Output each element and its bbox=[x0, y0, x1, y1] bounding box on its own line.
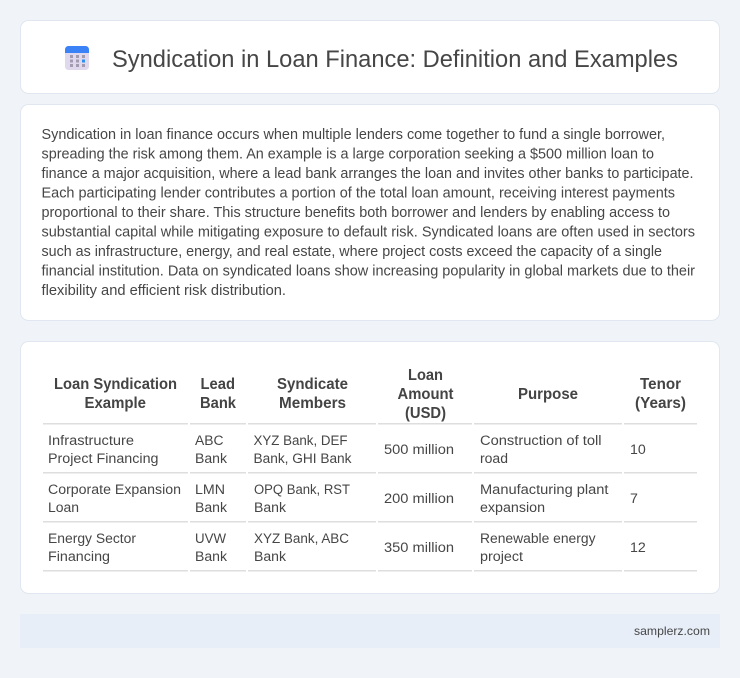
panel: header bbox=[20, 20, 720, 94]
text block: description paragraph: flexibility and efficient risk distribution. bbox=[42, 283, 286, 299]
text block: description paragraph bbox=[42, 127, 695, 299]
table row: energy sector financing: Bank bbox=[195, 549, 228, 565]
table row: energy sector financing: Financing bbox=[48, 549, 110, 565]
table header row: Bank bbox=[200, 395, 236, 412]
table row: infrastructure project financing: 10 bbox=[630, 442, 646, 458]
text block: description paragraph: substantial capital while mitigating exposure to default risk. Syndicated loans are often used in sectors bbox=[42, 224, 695, 240]
table row: infrastructure project financing bbox=[48, 433, 646, 467]
icon: calendar bbox=[65, 46, 89, 70]
table header row: Amount bbox=[398, 386, 454, 403]
table row: energy sector financing: 12 bbox=[630, 540, 646, 556]
table header row: (USD) bbox=[405, 405, 446, 422]
table row: corporate expansion loan: Bank bbox=[254, 500, 287, 516]
table row: corporate expansion loan: expansion bbox=[480, 500, 545, 516]
table row: infrastructure project financing: Infrastructure bbox=[48, 433, 134, 449]
panel: loan syndication table bbox=[20, 342, 720, 594]
table row: infrastructure project financing: Project Financing bbox=[48, 451, 158, 467]
table row: infrastructure project financing: ABC bbox=[195, 433, 224, 449]
table header row: Loan Syndication bbox=[54, 376, 177, 393]
table header row: Syndicate bbox=[277, 376, 348, 393]
panel: description bbox=[20, 104, 720, 320]
table row: infrastructure project financing: Construction of toll bbox=[480, 433, 602, 449]
table header row: Tenor bbox=[640, 376, 681, 393]
table header row bbox=[54, 367, 686, 422]
table row: corporate expansion loan: Corporate Expansion bbox=[48, 482, 181, 498]
text block: description paragraph: finance a major acquisition, where a lead bank arranges the loan and invites other banks to participate. bbox=[42, 166, 694, 182]
table row: corporate expansion loan: LMN bbox=[195, 482, 225, 498]
table row: corporate expansion loan bbox=[48, 482, 638, 516]
table header row: Loan bbox=[408, 367, 443, 384]
table header row: Example bbox=[84, 395, 146, 412]
table row: infrastructure project financing: Bank bbox=[195, 451, 228, 467]
table row: energy sector financing: 350 million bbox=[384, 540, 454, 556]
text block: description paragraph: financial institution. Data on syndicated loans show increasing popularity in global markets due to their bbox=[42, 264, 695, 280]
table row: energy sector financing: project bbox=[480, 549, 523, 565]
text block: description paragraph: spreading the risk among them. An example is a large corporation seeking a $500 million loan to bbox=[42, 146, 654, 162]
table row: corporate expansion loan: OPQ Bank, RST bbox=[254, 482, 350, 498]
footer credit: samplerz.com bbox=[634, 624, 710, 638]
table row: energy sector financing bbox=[48, 531, 646, 565]
text block: description paragraph: Syndication in loan finance occurs when multiple lenders come together to fund a single borrower, bbox=[42, 127, 665, 143]
table row: energy sector financing: Energy Sector bbox=[48, 531, 136, 547]
table row: corporate expansion loan: Loan bbox=[48, 500, 79, 516]
table row: infrastructure project financing: Bank, GHI Bank bbox=[254, 451, 352, 467]
footer bar bbox=[20, 614, 720, 648]
table row: energy sector financing: UVW bbox=[195, 531, 227, 547]
table row: infrastructure project financing: road bbox=[480, 451, 508, 467]
table row: energy sector financing: XYZ Bank, ABC bbox=[254, 531, 349, 547]
table row: energy sector financing: Bank bbox=[254, 549, 287, 565]
table row: energy sector financing: Renewable energy bbox=[480, 531, 596, 547]
table row: infrastructure project financing: 500 million bbox=[384, 442, 454, 458]
title: Syndication in Loan Finance: Definition and Examples bbox=[112, 46, 678, 73]
table row: corporate expansion loan: Bank bbox=[195, 500, 228, 516]
table row: corporate expansion loan: Manufacturing plant bbox=[480, 482, 609, 498]
table header row: Lead bbox=[200, 376, 235, 393]
table row: corporate expansion loan: 200 million bbox=[384, 491, 454, 507]
text block: description paragraph: such as infrastructure, energy, and real estate, where project costs exceed the capacity of a single bbox=[42, 244, 662, 260]
table header row: Purpose bbox=[518, 386, 578, 403]
table row: corporate expansion loan: 7 bbox=[630, 491, 638, 507]
text block: description paragraph: Each participating lender contributes a portion of the total loan amount, receiving interest payments bbox=[42, 186, 675, 202]
table header row: Members bbox=[279, 395, 346, 412]
text block: description paragraph: proportional to their share. This structure benefits both borrower and lenders by enabling access to bbox=[42, 205, 670, 221]
table header row: (Years) bbox=[635, 395, 686, 412]
table row: infrastructure project financing: XYZ Bank, DEF bbox=[254, 433, 348, 449]
